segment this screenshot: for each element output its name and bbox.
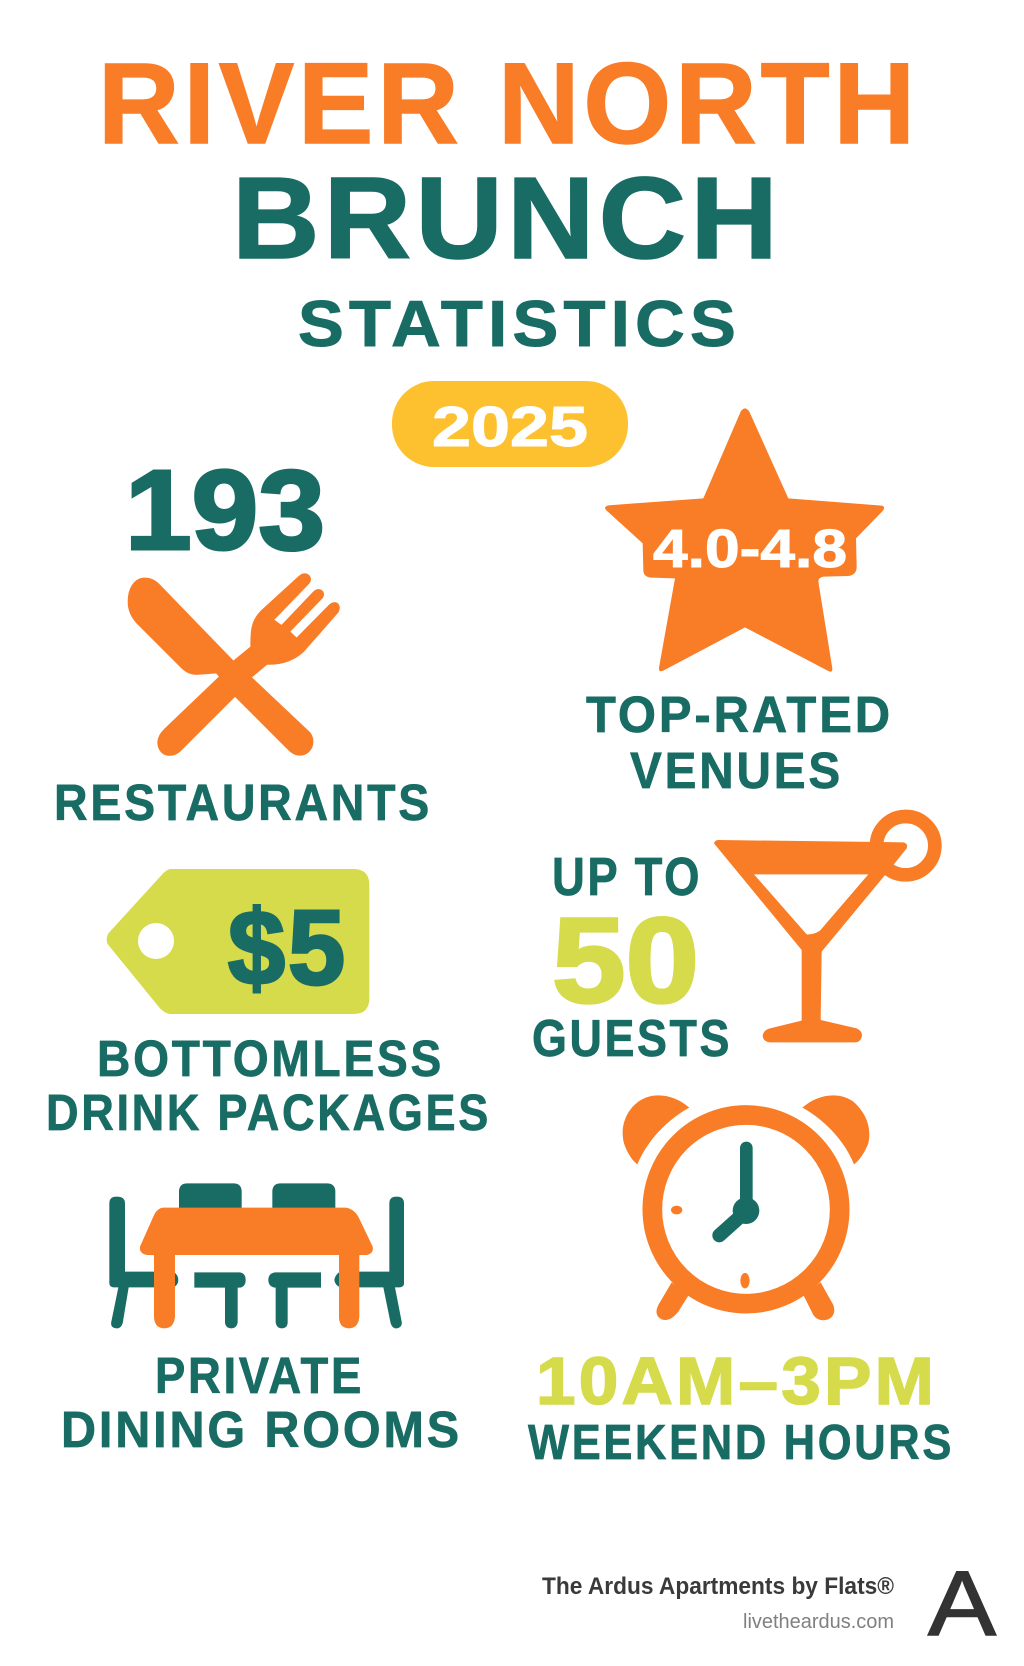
price: $5: [228, 889, 348, 1007]
stat: 50: 50: [552, 892, 699, 1028]
stat: 193: 193: [125, 447, 325, 573]
icon: dining table and chairs: [109, 1183, 404, 1328]
icon: star with rating: [605, 408, 884, 672]
brand name: The Ardus Apartments by Flats®: [542, 1573, 894, 1600]
label: drink packages: DRINK PACKAGES: [46, 1084, 491, 1141]
label: private: PRIVATE: [155, 1347, 364, 1404]
heading: River North: RIVER NORTH: [98, 40, 919, 168]
stat: hours: 10AM–3PM: [536, 1344, 937, 1419]
label: bottomless: BOTTOMLESS: [97, 1030, 444, 1087]
panel: top-rated venues: [586, 408, 893, 799]
panel: drink packages: [46, 869, 491, 1141]
website: livetheardus.com: [743, 1611, 894, 1633]
panel: private dining rooms: [61, 1183, 462, 1458]
panel: weekend hours: [528, 1095, 954, 1470]
label: weekend hours: WEEKEND HOURS: [528, 1416, 954, 1470]
panel: guests: [532, 816, 935, 1068]
label: guests: GUESTS: [532, 1010, 732, 1068]
label: dining rooms: DINING ROOMS: [61, 1401, 462, 1458]
label: up to: UP TO: [552, 847, 702, 907]
panel: restaurants: [54, 447, 432, 831]
label: restaurants: RESTAURANTS: [54, 774, 432, 831]
title block: [98, 40, 919, 360]
heading: Statistics: STATISTICS: [298, 287, 741, 360]
rating value: 4.0-4.8: [653, 519, 847, 579]
year badge: [392, 381, 628, 467]
icon: martini glass: [714, 816, 935, 1042]
logo: letter A: A: [928, 1553, 997, 1655]
heading: Brunch: BRUNCH: [232, 153, 782, 283]
label: top-rated: TOP-RATED: [586, 686, 893, 743]
icon: crossed knife and fork: [129, 575, 338, 755]
label: venues: VENUES: [630, 742, 843, 799]
icon: price tag: [107, 869, 369, 1014]
icon: alarm clock: [623, 1095, 869, 1320]
footer: brand: [542, 1553, 997, 1655]
year badge: 2025: [432, 395, 588, 459]
